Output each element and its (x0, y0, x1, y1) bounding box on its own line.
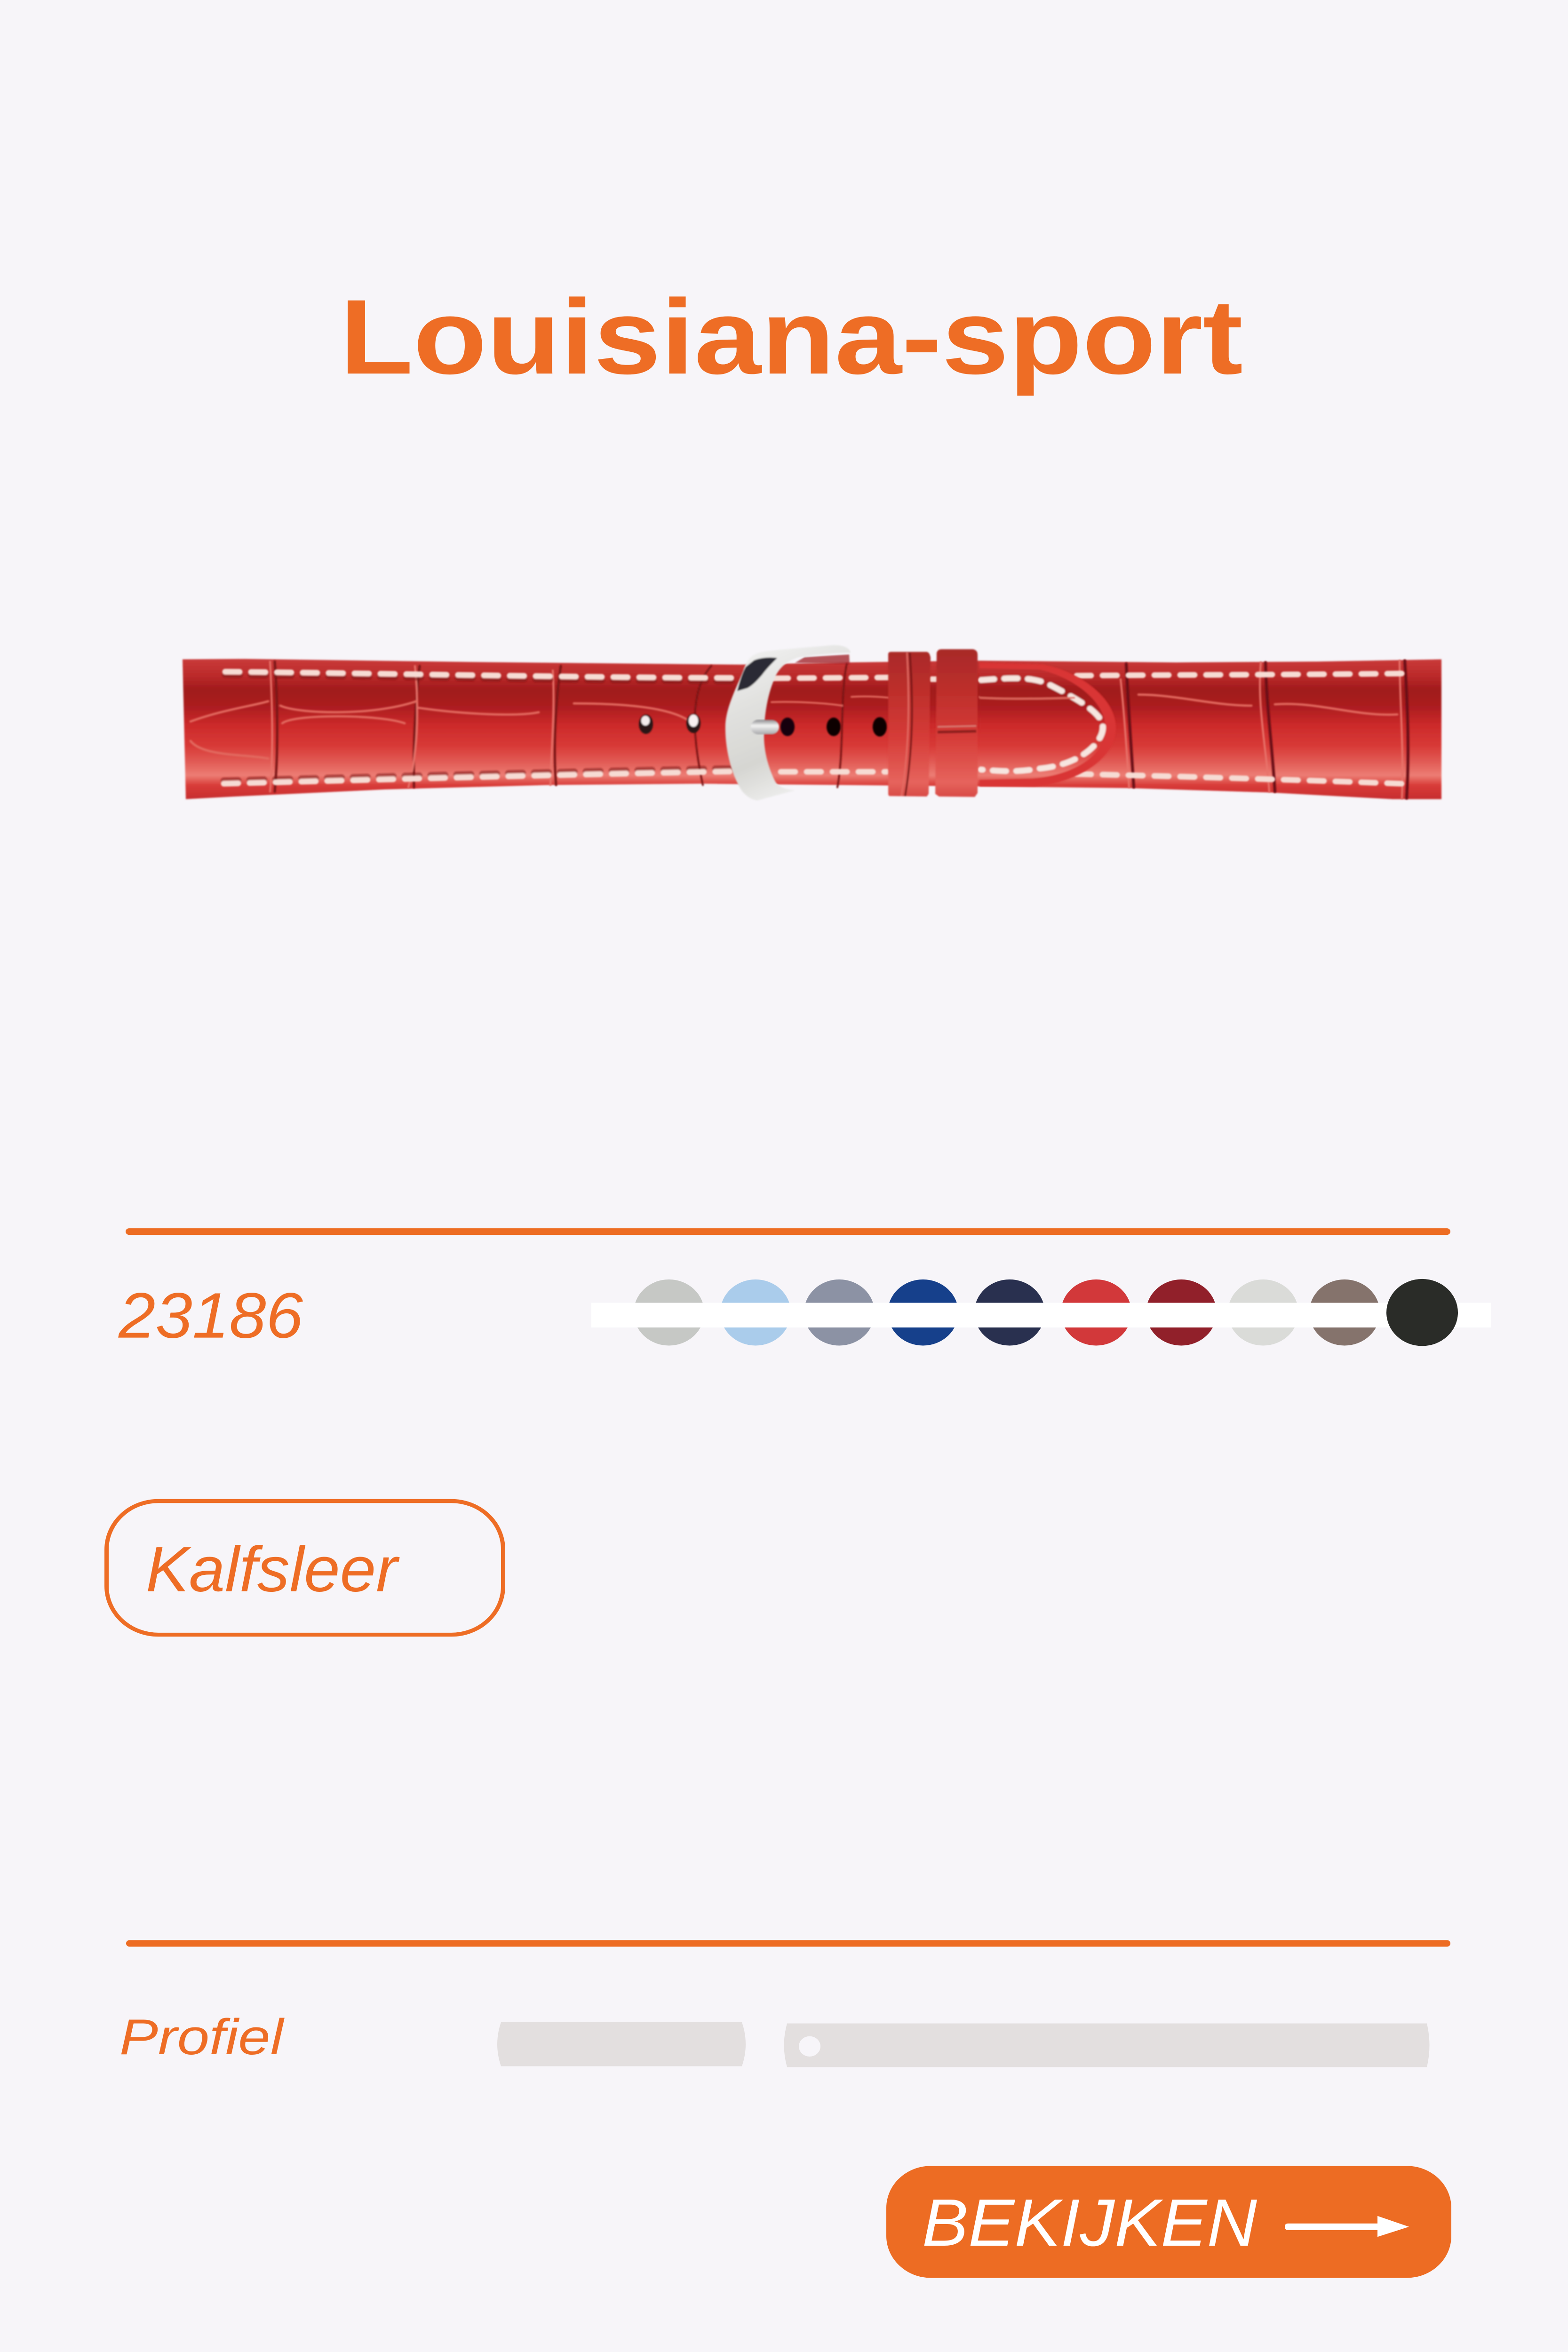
strap holes (639, 714, 887, 737)
button label: BEKIJKEN (922, 2185, 1258, 2260)
stitching (224, 672, 1406, 784)
profile label: Profiel (119, 2009, 285, 2065)
button background (886, 2166, 1451, 2278)
profile diagram (497, 2022, 1429, 2067)
white band over swatches (591, 1303, 1491, 1327)
material pill (106, 1501, 503, 1635)
article number: 23186 (118, 1279, 303, 1351)
hole dot (799, 2036, 820, 2057)
pill label: Kalfsleer (146, 1534, 400, 1605)
pill outline (106, 1501, 503, 1635)
black swatch (1386, 1279, 1458, 1346)
icon: arrow (1285, 2216, 1409, 2237)
buckle tongue (751, 720, 779, 734)
strap keepers (888, 649, 978, 797)
swatch row (634, 1279, 1380, 1345)
buckle side bar (497, 2022, 746, 2066)
long side bar (784, 2024, 1429, 2067)
colour swatches (591, 1279, 1491, 1346)
strap tip with stitching (979, 662, 1116, 787)
strap body (183, 659, 1441, 799)
buckle (725, 645, 851, 801)
divider line bottom (126, 1940, 1450, 1947)
divider line top (126, 1228, 1450, 1235)
title: Louisiana-sport (340, 278, 1243, 396)
watch strap illustration (183, 645, 1441, 801)
button (886, 2166, 1451, 2278)
crocodile texture (191, 660, 1408, 798)
